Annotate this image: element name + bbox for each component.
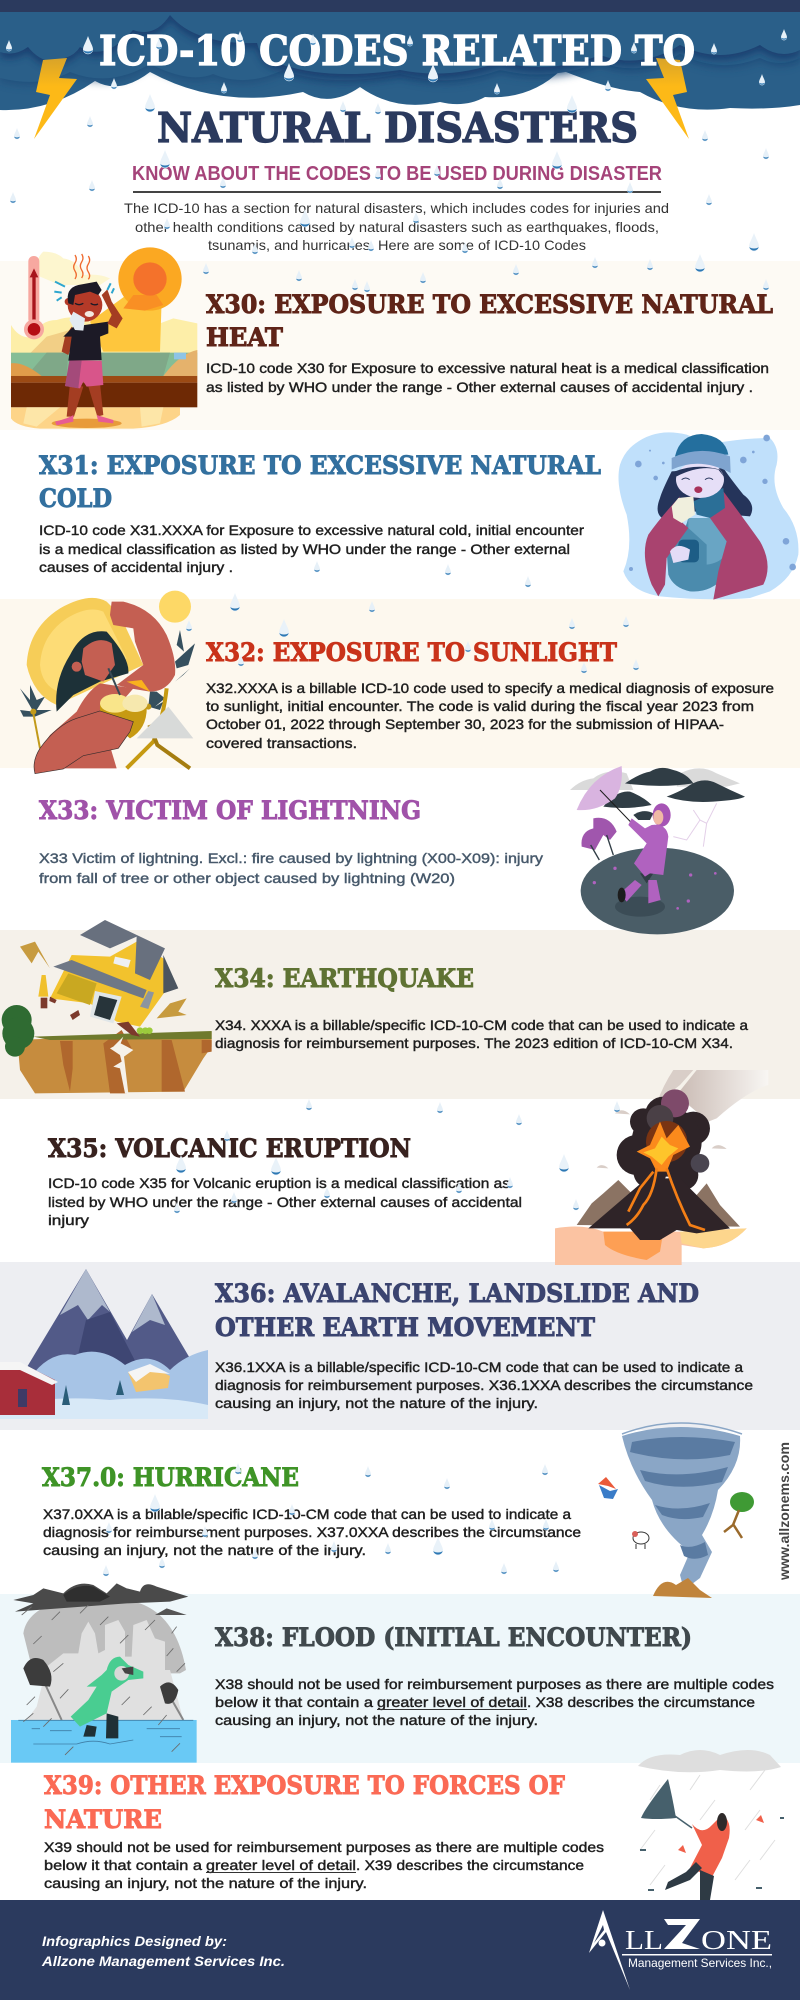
body text: diagnosis for reimbursement purposes. The 2023 edition of ICD-10-CM X34. bbox=[215, 1035, 733, 1051]
footer credit: Infographics Designed by: bbox=[42, 1933, 227, 1949]
body text bbox=[48, 1175, 522, 1228]
body text: greater level of detail bbox=[206, 1857, 356, 1873]
body text bbox=[39, 522, 584, 575]
body text: listed by WHO under the range - Other external causes of accidental bbox=[48, 1194, 522, 1210]
body text: covered transactions. bbox=[206, 735, 357, 751]
body text: X39 should not be used for reimbursement purposes as there are multiple codes bbox=[44, 1839, 604, 1855]
panel: X37 bbox=[0, 1423, 800, 1598]
body text: X36.1XXA is a billable/specific ICD-10-CM code that can be used to indicate a bbox=[215, 1359, 743, 1375]
intro text: other health conditions caused by natural disasters such as earthquakes, floods, bbox=[135, 219, 659, 235]
body text: . X38 describes the circumstance bbox=[527, 1694, 755, 1710]
body text: X32.XXXA is a billable ICD-10 code used to specify a medical diagnosis of exposure bbox=[206, 680, 774, 696]
heading: X34: EARTHQUAKE bbox=[215, 964, 474, 993]
panel: X33 bbox=[0, 766, 800, 934]
intro text: The ICD-10 has a section for natural disasters, which includes codes for injuries and bbox=[124, 200, 669, 216]
title: ICD-10 CODES RELATED TO bbox=[99, 27, 695, 75]
body text bbox=[44, 1839, 604, 1891]
illustration: woman in a lightning storm bbox=[570, 766, 745, 934]
body text bbox=[215, 1676, 774, 1728]
heading: X32: EXPOSURE TO SUNLIGHT bbox=[206, 638, 617, 667]
panel: X30 bbox=[0, 247, 800, 430]
panel: X34 bbox=[0, 920, 800, 1099]
body text: diagnosis for reimbursement purposes. X36.1XXA describes the circumstance bbox=[215, 1377, 753, 1393]
panel: X38 bbox=[0, 1583, 800, 1763]
panel backgrounds bbox=[0, 261, 800, 1763]
figure: overheated man bbox=[55, 282, 123, 425]
logo: Allzone bbox=[589, 1910, 772, 1990]
illustration: earthquake bbox=[2, 920, 212, 1093]
body text: greater level of detail bbox=[377, 1694, 527, 1710]
intro text bbox=[124, 200, 669, 253]
icon: left lightning bolt bbox=[34, 58, 77, 139]
icon: thermometer bbox=[24, 256, 44, 339]
body text bbox=[39, 850, 543, 886]
body text: injury bbox=[48, 1212, 89, 1228]
header: storm clouds bbox=[0, 0, 800, 139]
panel: X35 bbox=[0, 1070, 800, 1265]
heading bbox=[215, 1279, 699, 1342]
heading: COLD bbox=[39, 484, 112, 513]
icon: right lightning bolt bbox=[646, 58, 689, 139]
heading bbox=[206, 290, 773, 352]
body text: . X39 describes the circumstance bbox=[356, 1857, 584, 1873]
footer credit: Allzone Management Services Inc. bbox=[41, 1953, 285, 1969]
body text: causing an injury, not the nature of the injury. bbox=[43, 1542, 366, 1558]
body text: ICD-10 code X31.XXXA for Exposure to excessive natural cold, initial encounter bbox=[39, 522, 584, 538]
body text: diagnosis for reimbursement purposes. X37.0XXA describes the circumstance bbox=[43, 1524, 581, 1540]
heading: OTHER EARTH MOVEMENT bbox=[215, 1313, 595, 1342]
body text bbox=[206, 360, 769, 395]
heading: X31: EXPOSURE TO EXCESSIVE NATURAL bbox=[39, 451, 601, 480]
body text: is a medical classification as listed by WHO under the range - Other external bbox=[39, 541, 570, 557]
title: NATURAL DISASTERS bbox=[157, 104, 638, 152]
body text: ICD-10 code X30 for Exposure to excessive natural heat is a medical classification bbox=[206, 360, 769, 376]
heading: X38: FLOOD (INITIAL ENCOUNTER) bbox=[215, 1623, 692, 1652]
raindrops bbox=[6, 29, 787, 1576]
illustration: tornado bbox=[598, 1423, 754, 1598]
footer bbox=[0, 1900, 800, 2000]
body text: causing an injury, not the nature of the injury. bbox=[44, 1875, 367, 1891]
website label: www.allzonems.com bbox=[776, 1442, 792, 1581]
heading: X33: VICTIM OF LIGHTNING bbox=[39, 796, 421, 825]
body text: below it that contain a bbox=[215, 1694, 373, 1710]
illustration: woman in cold bbox=[618, 432, 798, 600]
heading: NATURE bbox=[44, 1805, 162, 1834]
body text bbox=[43, 1506, 581, 1558]
body text: October 01, 2022 through September 30, 2023 for the submission of HIPAA- bbox=[206, 716, 724, 732]
body text: causing an injury, not the nature of the injury. bbox=[215, 1712, 538, 1728]
panel: X39 bbox=[0, 1750, 800, 1900]
body text: causes of accidental injury . bbox=[39, 559, 233, 575]
heading bbox=[39, 451, 601, 513]
logo: Allzone: ONE bbox=[701, 1925, 772, 1955]
body text bbox=[215, 1359, 753, 1411]
illustration: avalanche mountains bbox=[0, 1269, 208, 1419]
heading: X39: OTHER EXPOSURE TO FORCES OF bbox=[44, 1771, 565, 1800]
footer credit bbox=[41, 1933, 285, 1969]
illustration: woman in windstorm bbox=[638, 1750, 784, 1900]
panel: X36 bbox=[0, 1262, 800, 1430]
panel: X32 bbox=[0, 591, 800, 774]
title bbox=[99, 27, 695, 152]
body text: below it that contain a bbox=[44, 1857, 202, 1873]
heading: X30: EXPOSURE TO EXCESSIVE NATURAL bbox=[206, 290, 773, 319]
body text: X33 Victim of lightning. Excl.: fire caused by lightning (X00-X09): injury bbox=[39, 850, 543, 866]
subtitle: KNOW ABOUT THE CODES TO BE USED DURING DISASTER bbox=[132, 163, 663, 185]
illustration: woman in the sun bbox=[20, 591, 195, 774]
body text bbox=[206, 680, 774, 751]
body text: X34. XXXA is a billable/specific ICD-10-CM code that can be used to indicate a bbox=[215, 1017, 748, 1033]
body text: as listed by WHO under the range - Other external causes of accidental injury . bbox=[206, 379, 753, 395]
illustration: flood bbox=[11, 1583, 197, 1763]
panel: X31 bbox=[0, 430, 800, 600]
body text: ICD-10 code X35 for Volcanic eruption is a medical classification as bbox=[48, 1175, 510, 1191]
intro text: tsunamis, and hurricanes. Here are some of ICD-10 Codes bbox=[208, 237, 586, 253]
logo: Allzone: LL bbox=[625, 1925, 663, 1955]
heading: X35: VOLCANIC ERUPTION bbox=[48, 1134, 411, 1163]
heading bbox=[44, 1771, 565, 1834]
illustration: erupting volcano bbox=[555, 1070, 768, 1265]
body text: from fall of tree or other object caused by lightning (W20) bbox=[39, 870, 455, 886]
heading: X37.0: HURRICANE bbox=[42, 1463, 299, 1492]
body text bbox=[215, 1017, 748, 1051]
body text: X38 should not be used for reimbursement purposes as there are multiple codes bbox=[215, 1676, 774, 1692]
logo: Allzone: Management Services Inc., bbox=[628, 1956, 772, 1970]
body text: to sunlight, initial encounter. The code is valid during the fiscal year 2023 from bbox=[206, 698, 754, 714]
heading: HEAT bbox=[206, 323, 283, 352]
body text: X37.0XXA is a billable/specific ICD-10-CM code that can be used to indicate a bbox=[43, 1506, 571, 1522]
heading: X36: AVALANCHE, LANDSLIDE AND bbox=[215, 1279, 699, 1308]
illustration: heat exhaustion bbox=[11, 247, 197, 429]
body text: causing an injury, not the nature of the injury. bbox=[215, 1395, 538, 1411]
